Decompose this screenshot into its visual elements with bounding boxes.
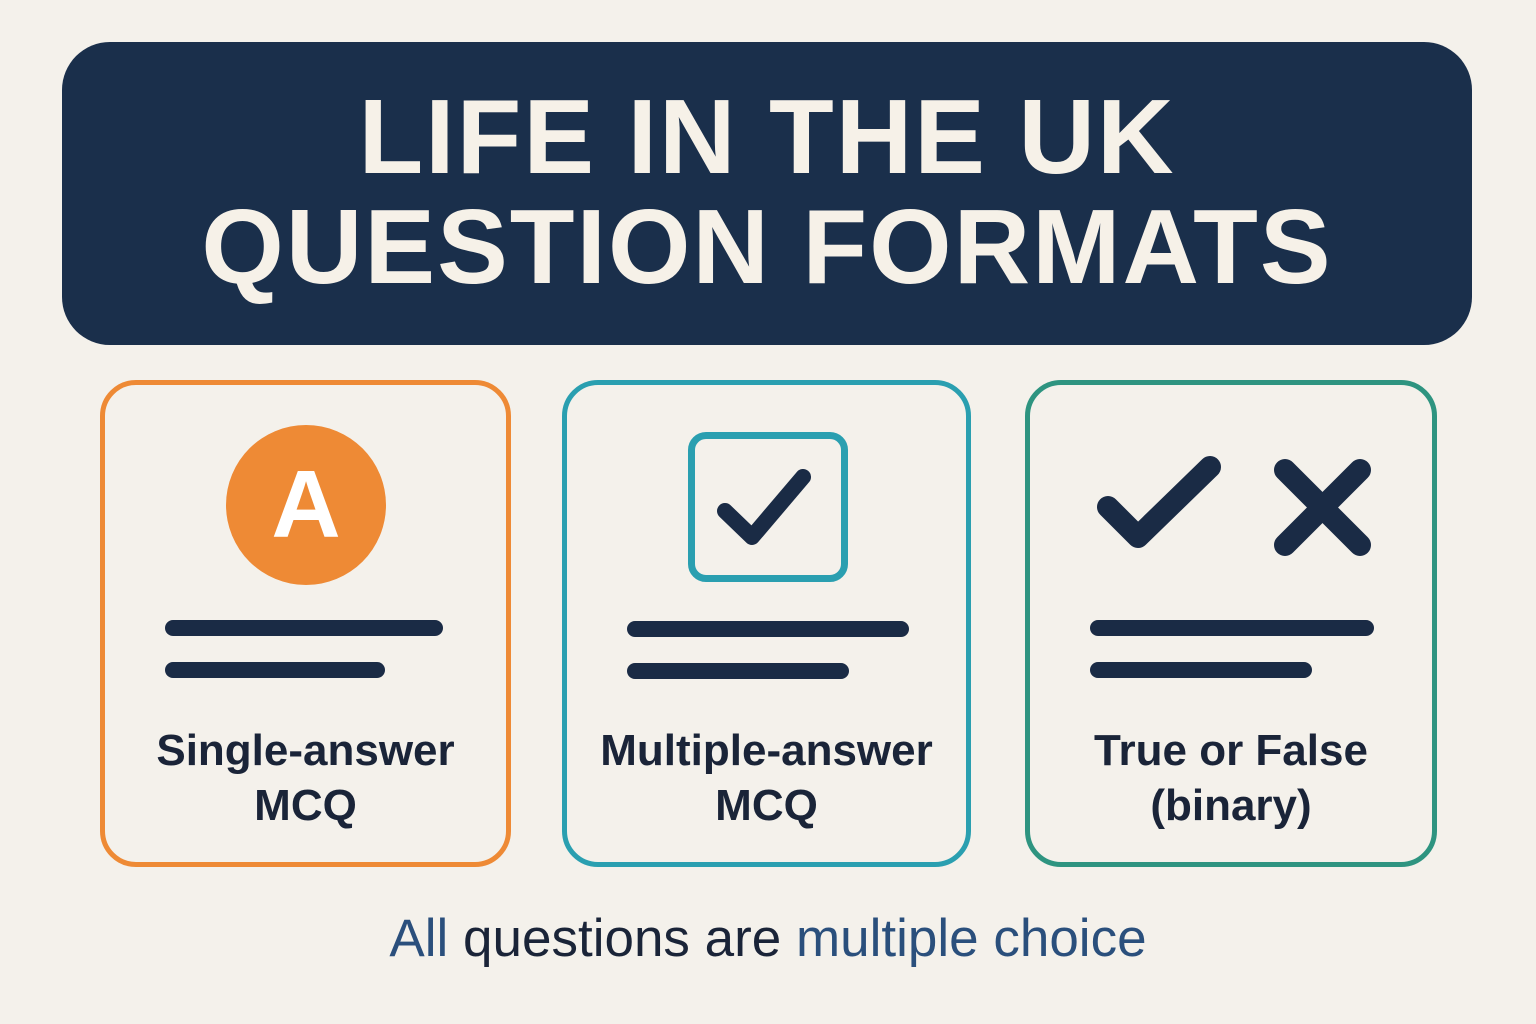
label: Single-answer <box>156 726 455 775</box>
label: (binary) <box>1150 781 1312 830</box>
icon: A circle: A <box>271 451 341 558</box>
icon: checkbox <box>688 432 848 582</box>
title <box>201 78 1333 306</box>
panel: single-answer <box>100 380 511 867</box>
title banner <box>62 42 1472 345</box>
label <box>1094 726 1368 830</box>
text lines <box>627 621 909 679</box>
title: QUESTION FORMATS <box>201 188 1333 306</box>
label: MCQ <box>254 781 357 830</box>
label: True or False <box>1094 726 1368 775</box>
footer text: All questions are multiple choice <box>389 909 1147 968</box>
icon: A circle <box>226 425 386 585</box>
text lines <box>1090 620 1374 678</box>
title: LIFE IN THE UK <box>358 78 1176 196</box>
panel: multiple-answer <box>562 380 971 867</box>
panel: true or false <box>1025 380 1437 867</box>
label: Multiple-answer <box>600 726 933 775</box>
text lines <box>165 620 443 678</box>
label <box>156 726 455 830</box>
label: MCQ <box>715 781 818 830</box>
label <box>600 726 933 830</box>
icon: check and cross <box>1097 456 1371 556</box>
